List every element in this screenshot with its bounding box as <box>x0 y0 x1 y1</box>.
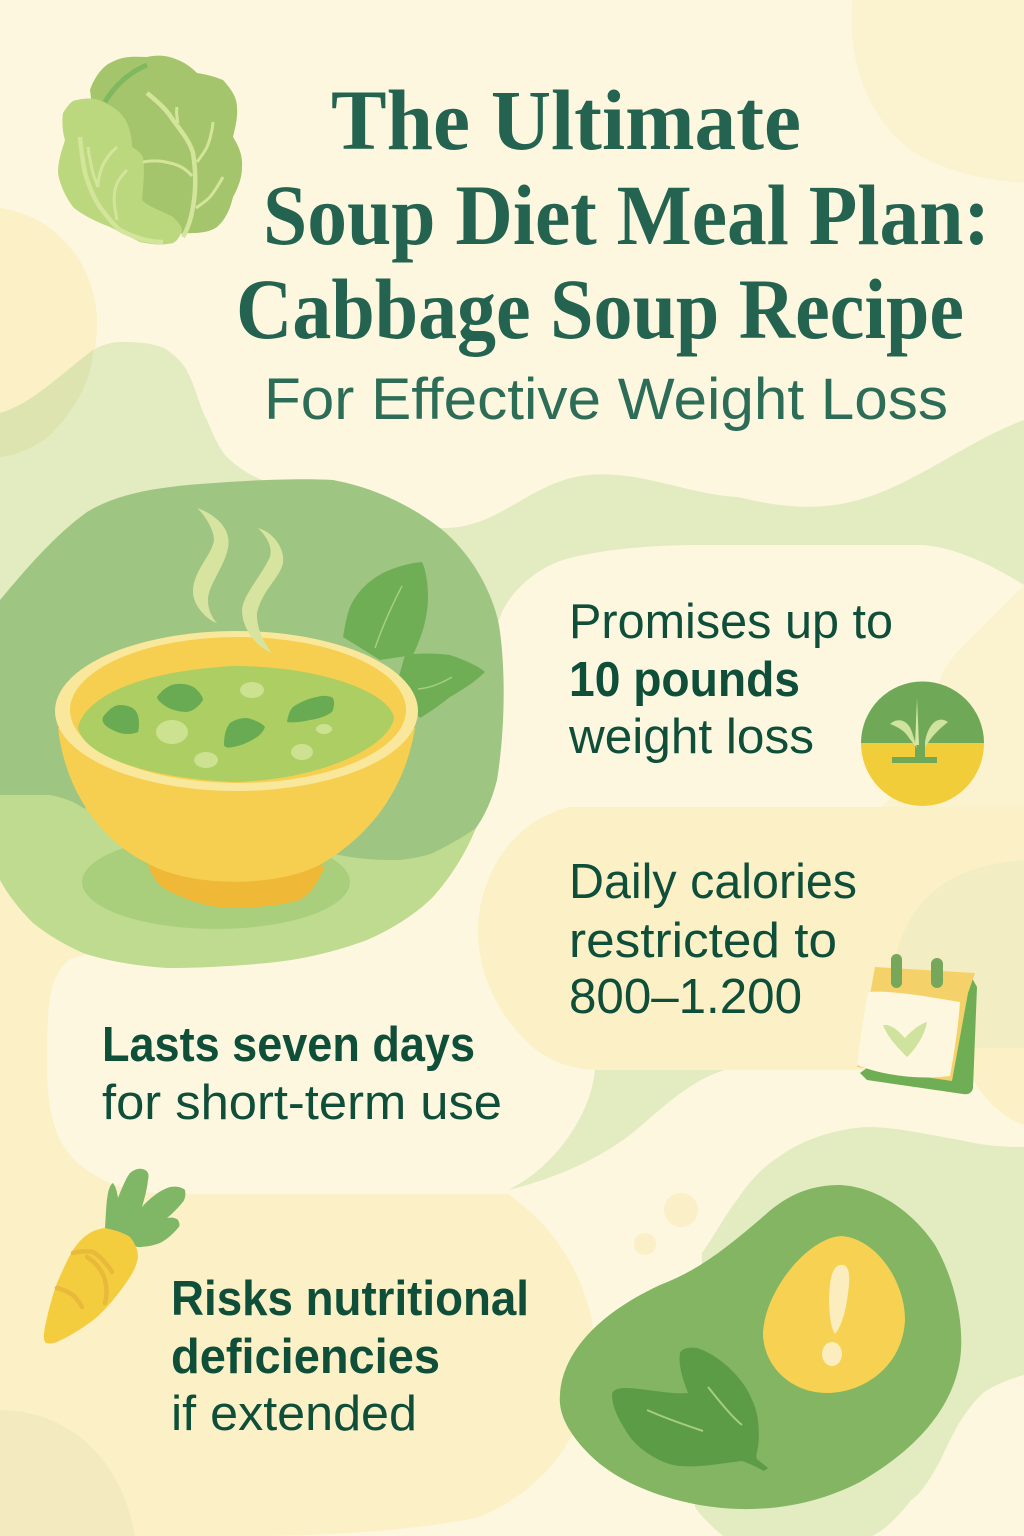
text: risks <box>171 1272 529 1441</box>
text: promises: weight loss <box>568 710 814 764</box>
text: seven days <box>102 1018 502 1130</box>
bowl rim <box>55 631 418 791</box>
title: Cabbage Soup Recipe <box>236 261 964 357</box>
panel: risks background <box>0 870 593 1536</box>
text: promises: 10 pounds <box>569 653 800 707</box>
bowl body <box>58 728 415 882</box>
icon: leaf <box>612 1348 768 1471</box>
illustration: warning blob <box>560 1185 961 1509</box>
steam <box>193 508 229 623</box>
text: risks: if extended <box>171 1387 417 1441</box>
leaves <box>343 562 485 718</box>
soup vegetable pieces <box>156 682 332 768</box>
text: calories: 800–1.200 <box>569 970 802 1024</box>
background blob: bottom left <box>0 1410 135 1536</box>
text: calories: Daily calories <box>569 855 857 909</box>
text: calories <box>569 855 857 1024</box>
title <box>236 72 990 357</box>
title: The Ultimate <box>331 72 801 168</box>
icon: calendar <box>857 954 977 1094</box>
decorative dots <box>634 1193 698 1255</box>
text: seven days: for short-term use <box>102 1076 502 1130</box>
text: seven days: Lasts seven days <box>102 1018 475 1072</box>
soup greens <box>103 684 334 748</box>
text: calories: restricted to <box>569 914 837 968</box>
text: promises: Promises up to <box>569 595 893 649</box>
illustration: soup bowl <box>0 479 504 968</box>
text: promises <box>568 595 893 764</box>
soup <box>78 666 394 782</box>
text: risks: Risks nutritional <box>171 1272 529 1326</box>
bowl foot <box>147 860 325 908</box>
icon: cabbage <box>58 56 242 245</box>
icon: sprout <box>861 682 984 806</box>
text: risks: deficiencies <box>171 1330 440 1384</box>
icon: carrot <box>44 1169 185 1344</box>
subtitle: For Effective Weight Loss <box>264 367 948 432</box>
shadow under bowl <box>82 835 350 929</box>
